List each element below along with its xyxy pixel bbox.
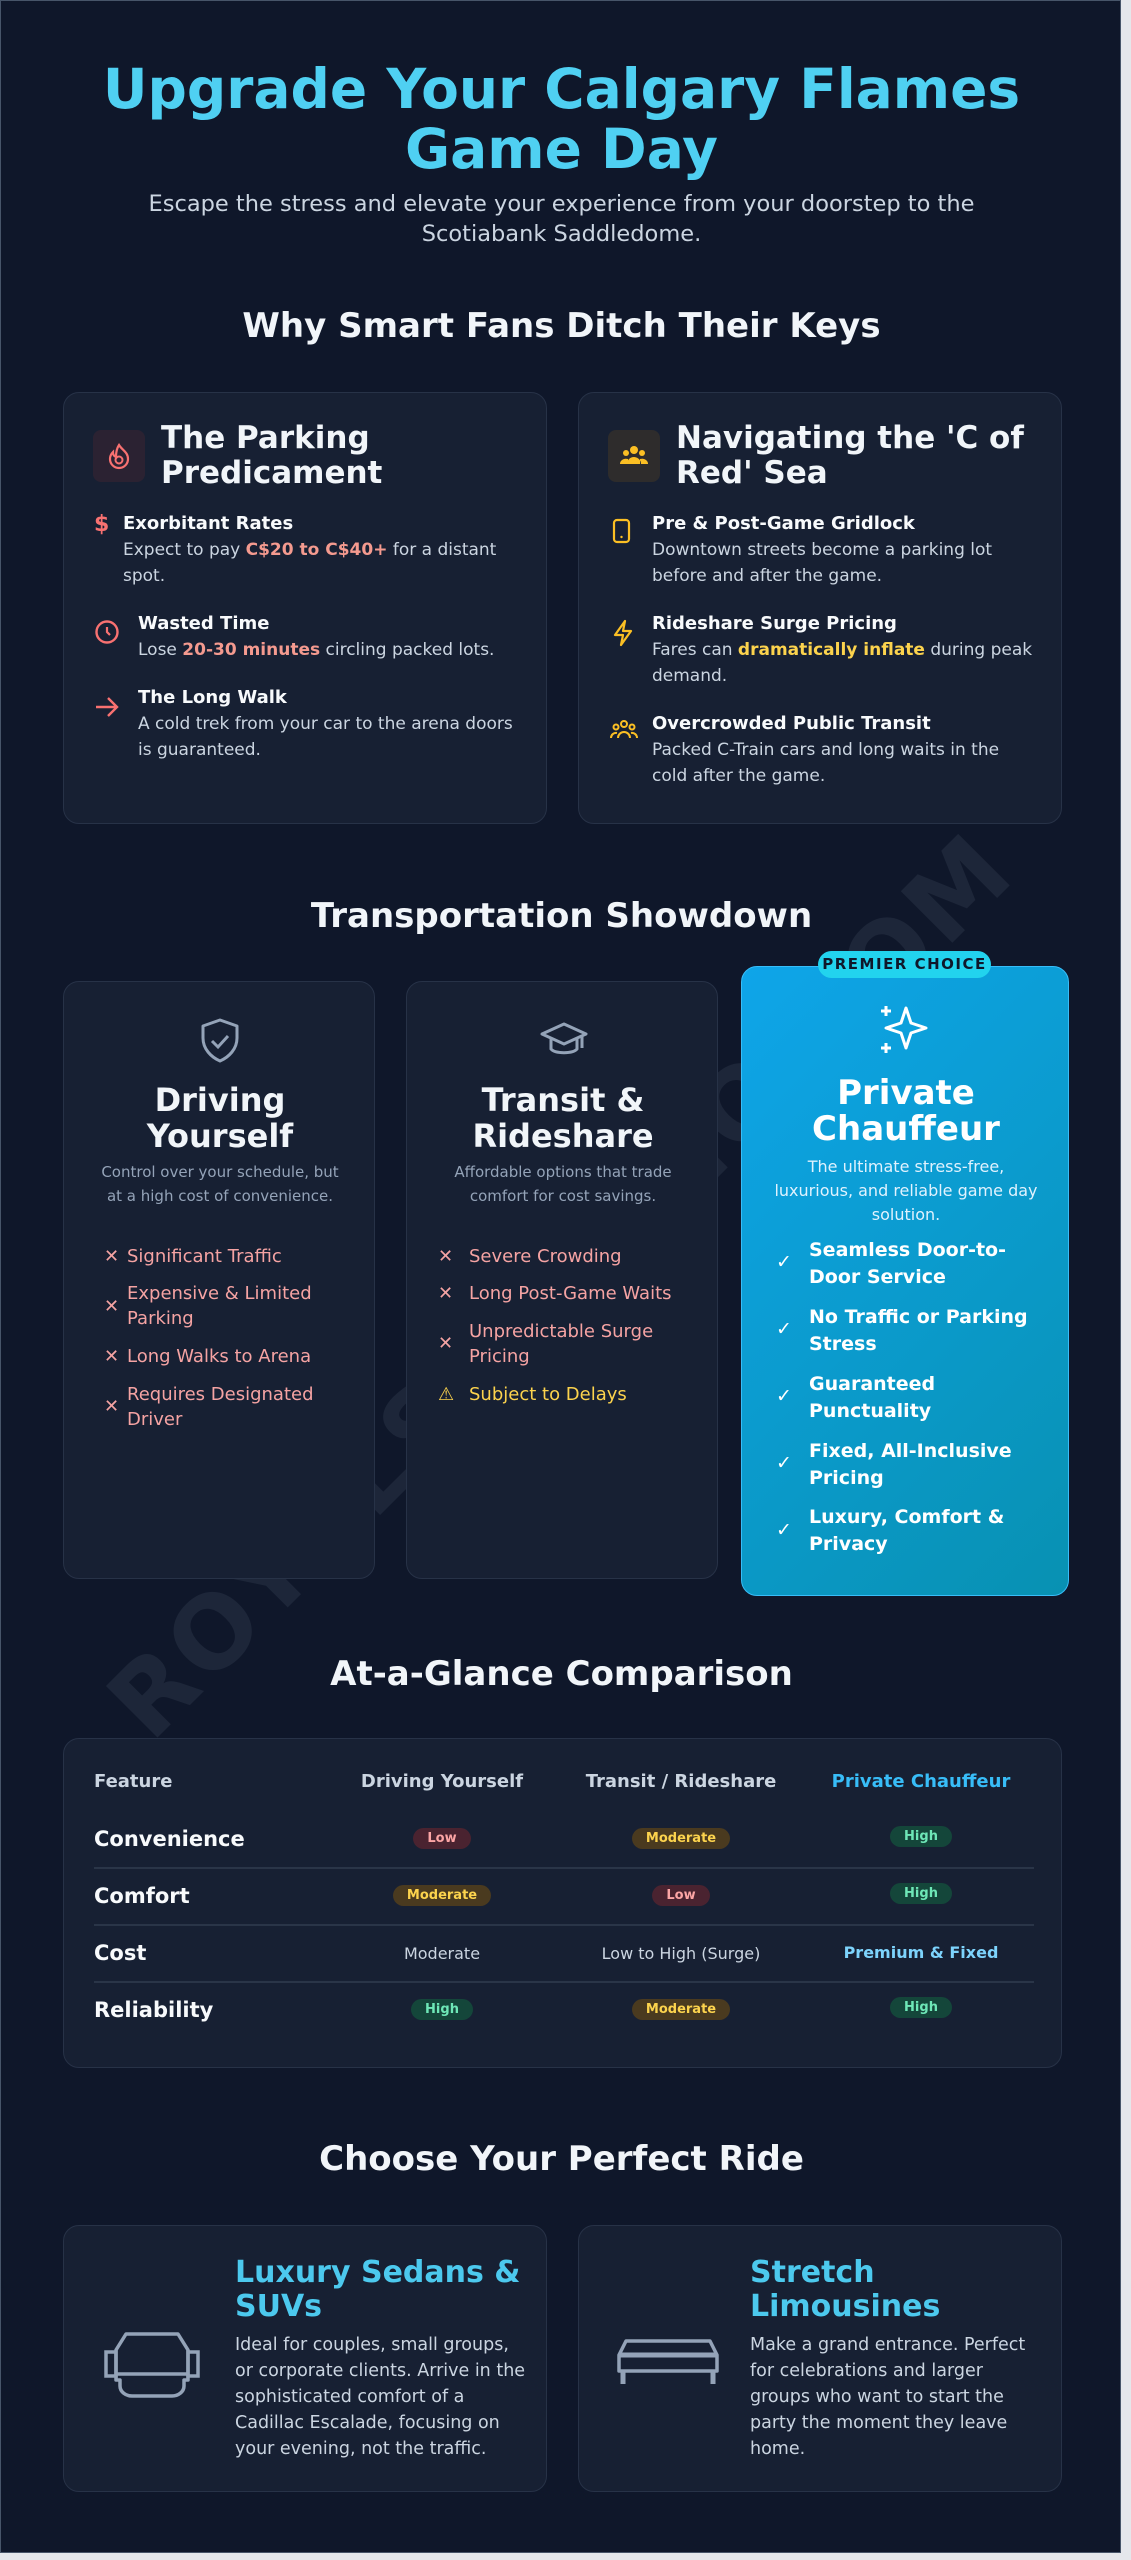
panel: parking predicament: Lose 20-30 minutes circling packed lots. bbox=[138, 640, 494, 660]
desc: The ultimate stress-free, luxurious, and reliable game day solution. bbox=[774, 1157, 1038, 1224]
panel: sea of red: before and after the game. bbox=[652, 566, 882, 586]
desc: Affordable options that trade comfort for cost savings. bbox=[454, 1163, 672, 1205]
panel: transit & rideshare bbox=[406, 981, 718, 1579]
heading: choose ride: Choose Your Perfect Ride bbox=[319, 2139, 804, 2179]
desc: home. bbox=[750, 2439, 805, 2459]
watermark: ROYALSKYLIMO.COM bbox=[85, 810, 1036, 1761]
list: benefits: Seamless Door-to-Door Service bbox=[809, 1239, 1006, 1288]
desc bbox=[750, 2335, 1025, 2459]
panel: parking predicament bbox=[63, 392, 547, 824]
subtitle: Escape the stress and elevate your experience from your doorstep to the Scotiabank Saddledome. bbox=[149, 191, 974, 247]
heading: why smart fans: Why Smart Fans Ditch Their Keys bbox=[242, 306, 881, 346]
item: walk bbox=[96, 697, 119, 717]
desc: sophisticated comfort of a bbox=[235, 2387, 464, 2407]
list: cons: Significant Traffic bbox=[127, 1246, 282, 1267]
panel: driving yourself bbox=[63, 981, 375, 1579]
panel: sea of red: Overcrowded Public Transit bbox=[652, 713, 931, 734]
row: reliability: High bbox=[904, 2000, 938, 2015]
list: benefits: Fixed, All-Inclusive Pricing bbox=[809, 1440, 1012, 1489]
table: comparison bbox=[63, 1738, 1062, 2068]
row: cost: Low to High (Surge) bbox=[602, 1944, 760, 1963]
row: convenience: Convenience bbox=[94, 1827, 245, 1851]
desc: for celebrations and larger bbox=[750, 2361, 983, 2381]
header row: Private Chauffeur bbox=[832, 1771, 1010, 1792]
heading: Chauffeur bbox=[812, 1109, 1000, 1149]
heading: The Parking bbox=[161, 420, 370, 456]
heading bbox=[161, 420, 382, 491]
row: convenience: Moderate bbox=[646, 1831, 716, 1846]
row: comfort bbox=[94, 1883, 952, 1908]
title: SUVs bbox=[235, 2289, 322, 2324]
header row: Driving Yourself bbox=[361, 1771, 523, 1792]
title: Upgrade Your Calgary Flames bbox=[103, 57, 1020, 121]
row: comfort: Moderate bbox=[407, 1888, 477, 1903]
list: benefits bbox=[776, 1239, 1028, 1555]
panel: private chauffeur bbox=[741, 966, 1069, 1596]
panel: sea of red: demand. bbox=[652, 666, 727, 686]
header row: Feature bbox=[94, 1771, 172, 1792]
row: comfort: Comfort bbox=[94, 1884, 190, 1908]
list: benefits: Guaranteed Punctuality bbox=[809, 1373, 935, 1422]
panel: parking predicament: Expect to pay C$20 to C$40+ for a distant spot. bbox=[123, 540, 496, 586]
heading: Navigating the 'C of bbox=[676, 420, 1024, 456]
desc: groups who want to start the bbox=[750, 2387, 1004, 2407]
heading: Rideshare bbox=[472, 1117, 654, 1155]
desc: Ideal for couples, small groups, bbox=[235, 2335, 509, 2355]
title: Limousines bbox=[750, 2289, 940, 2324]
row: convenience: High bbox=[904, 1829, 938, 1844]
panel: parking predicament: Exorbitant Rates bbox=[123, 513, 293, 534]
heading bbox=[676, 420, 1024, 491]
title bbox=[750, 2255, 940, 2324]
item: transit bbox=[610, 720, 638, 738]
row: convenience: Low bbox=[427, 1831, 457, 1846]
heading: showdown: Transportation Showdown bbox=[311, 896, 812, 936]
header row: Transit / Rideshare bbox=[586, 1771, 776, 1792]
title: Stretch bbox=[750, 2255, 875, 2290]
panel: parking predicament: The Long Walk bbox=[138, 687, 287, 708]
row: cost: Moderate bbox=[404, 1944, 480, 1963]
item: gridlock bbox=[612, 518, 630, 544]
desc bbox=[235, 2335, 525, 2459]
row: reliability bbox=[94, 1997, 952, 2022]
header row bbox=[94, 1771, 1010, 1792]
list: cons: ✕ bbox=[104, 1296, 119, 1317]
row: comfort: High bbox=[904, 1886, 938, 1901]
icon: flame bbox=[93, 430, 145, 482]
panel: parking predicament: A cold trek from your car to the arena doors is guaranteed. bbox=[138, 714, 513, 760]
title bbox=[103, 57, 1020, 181]
list: cons: Severe Crowding bbox=[469, 1246, 622, 1267]
row: reliability: Moderate bbox=[646, 2002, 716, 2017]
panel: parking predicament: Wasted Time bbox=[138, 613, 269, 634]
icon: suv bbox=[104, 2332, 200, 2398]
badge: premier choice bbox=[818, 951, 991, 978]
panel: sea of red: Downtown streets become a parking lot bbox=[652, 540, 992, 560]
heading: Driving bbox=[155, 1081, 285, 1119]
panel: stretch limousines bbox=[578, 2225, 1062, 2492]
panel: sea of red: Rideshare Surge Pricing bbox=[652, 613, 897, 634]
desc: Make a grand entrance. Perfect bbox=[750, 2335, 1025, 2355]
heading: Yourself bbox=[147, 1117, 293, 1155]
row: cost: Premium & Fixed bbox=[844, 1943, 998, 1962]
desc: party the moment they leave bbox=[750, 2413, 1007, 2433]
panel: sea of red: Fares can dramatically inflate during peak bbox=[652, 640, 1032, 660]
icon: people bbox=[608, 430, 660, 482]
row: reliability: High bbox=[425, 2002, 459, 2017]
item: rates: $ bbox=[94, 512, 109, 537]
desc: or corporate clients. Arrive in the bbox=[235, 2361, 525, 2381]
title: Luxury Sedans & bbox=[235, 2255, 520, 2290]
panel: luxury sedans bbox=[63, 2225, 547, 2492]
list: cons: Subject to Delays bbox=[469, 1384, 627, 1405]
heading: Red' Sea bbox=[676, 455, 828, 491]
list: cons: ✕ bbox=[104, 1246, 119, 1267]
row: reliability: Reliability bbox=[94, 1998, 213, 2022]
list: cons: Long Walks to Arena bbox=[127, 1346, 311, 1367]
list: benefits: ✓ bbox=[776, 1452, 792, 1474]
panel: sea of red: Pre & Post-Game Gridlock bbox=[652, 513, 915, 534]
icon: cap bbox=[540, 1022, 588, 1054]
list: cons: Unpredictable Surge Pricing bbox=[469, 1321, 653, 1367]
list: cons: Long Post-Game Waits bbox=[469, 1283, 672, 1304]
list: cons: ✕ bbox=[104, 1396, 119, 1417]
icon: sparkles bbox=[881, 1006, 928, 1053]
list: benefits: No Traffic or Parking Stress bbox=[809, 1306, 1028, 1355]
list: benefits: ✓ bbox=[776, 1385, 792, 1407]
heading bbox=[472, 1081, 654, 1155]
heading bbox=[146, 1081, 294, 1155]
list: benefits: ✓ bbox=[776, 1519, 792, 1541]
desc: Control over your schedule, but at a high cost of convenience. bbox=[101, 1163, 339, 1205]
heading: Predicament bbox=[161, 455, 382, 491]
item: time bbox=[95, 620, 119, 644]
heading: comparison: At-a-Glance Comparison bbox=[330, 1654, 793, 1694]
panel: sea of red: Packed C-Train cars and long waits in the bbox=[652, 740, 999, 760]
list: cons: ✕ bbox=[438, 1333, 453, 1354]
list: cons: Requires Designated Driver bbox=[127, 1384, 314, 1430]
list: benefits: ✓ bbox=[776, 1251, 792, 1273]
row: comfort: Low bbox=[666, 1888, 696, 1903]
list: benefits: ✓ bbox=[776, 1318, 792, 1340]
list: cons: ✕ bbox=[438, 1283, 453, 1304]
heading bbox=[812, 1073, 1000, 1149]
item: surge bbox=[614, 620, 632, 646]
panel: sea of red: cold after the game. bbox=[652, 766, 825, 786]
desc: your evening, not the traffic. bbox=[235, 2439, 486, 2459]
panel: sea of red bbox=[578, 392, 1062, 824]
title: Game Day bbox=[405, 117, 718, 181]
heading: Transit & bbox=[482, 1081, 644, 1119]
list: cons: ✕ bbox=[438, 1246, 453, 1267]
list: cons: ✕ bbox=[104, 1346, 119, 1367]
heading: Private bbox=[837, 1073, 975, 1113]
row: cost bbox=[94, 1941, 998, 1965]
badge: premier choice: PREMIER CHOICE bbox=[822, 955, 987, 973]
list: cons bbox=[438, 1246, 672, 1405]
icon: shield bbox=[202, 1018, 238, 1062]
list: cons: ⚠ bbox=[438, 1384, 454, 1405]
title bbox=[235, 2255, 520, 2324]
row: convenience bbox=[94, 1826, 952, 1851]
list: cons bbox=[104, 1246, 314, 1430]
icon: limo bbox=[617, 2339, 719, 2384]
row: cost: Cost bbox=[94, 1941, 146, 1965]
desc: Cadillac Escalade, focusing on bbox=[235, 2413, 500, 2433]
list: benefits: Luxury, Comfort & Privacy bbox=[809, 1506, 1004, 1555]
list: cons: Expensive & Limited Parking bbox=[127, 1283, 312, 1329]
